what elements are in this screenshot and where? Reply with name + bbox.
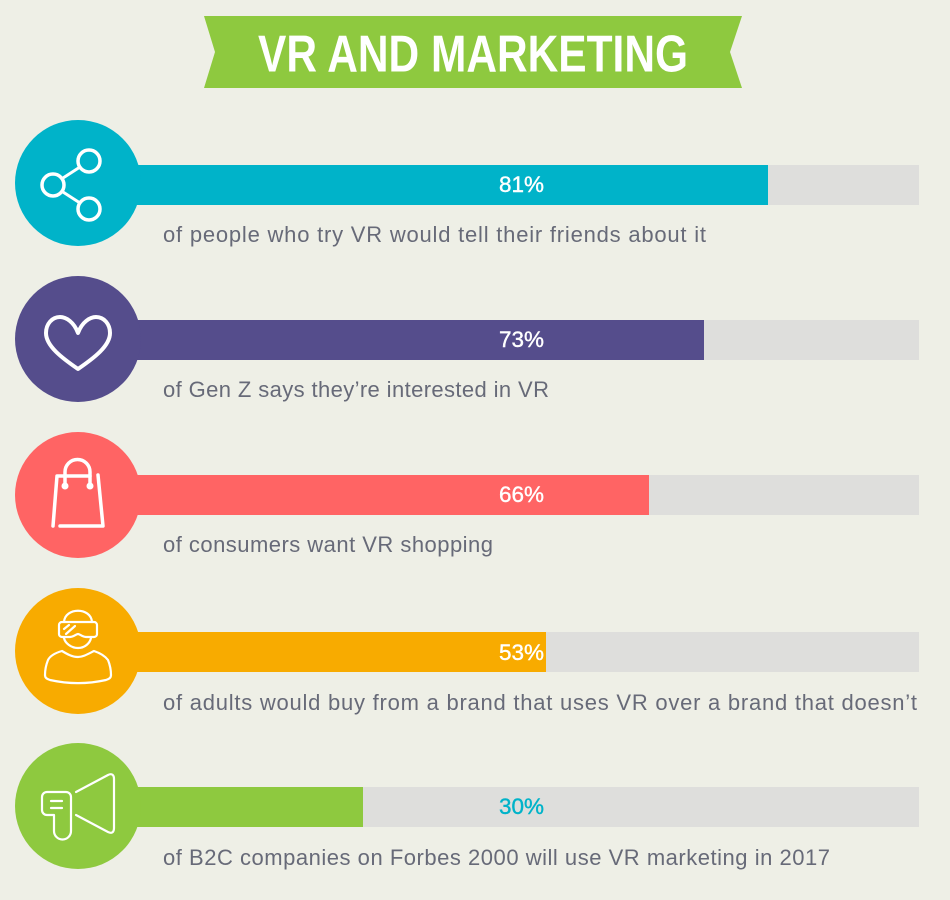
- bar: 66%: [78, 475, 649, 515]
- caption: of consumers want VR shopping: [163, 532, 493, 557]
- icon circle: share: [15, 120, 141, 246]
- panel: row 5 megaphone: [15, 743, 919, 870]
- panel: row 2 heart: [15, 276, 919, 402]
- panel: row 1 share: [15, 120, 919, 247]
- value 81%: 81%: [499, 172, 544, 197]
- icon circle: shopping bag: [15, 432, 141, 558]
- panel: row 3 shopping: [15, 432, 919, 558]
- bar: 30%: [78, 787, 363, 827]
- value 53%: 53%: [499, 640, 544, 665]
- value 66%: 66%: [499, 482, 544, 507]
- icon circle: person with VR headset: [15, 588, 141, 714]
- panel: row 4 VR headset: [15, 588, 919, 715]
- icon circle: heart: [15, 276, 141, 402]
- bar: 53%: [78, 632, 546, 672]
- title: VR AND MARKETING: [258, 26, 688, 84]
- caption: of B2C companies on Forbes 2000 will use VR marketing in 2017: [163, 845, 830, 870]
- value 30%: 30%: [499, 794, 544, 819]
- bar: 73%: [78, 320, 704, 360]
- title banner: [204, 16, 742, 88]
- icon circle: megaphone: [15, 743, 141, 869]
- value 73%: 73%: [499, 327, 544, 352]
- caption: of people who try VR would tell their friends about it: [163, 222, 706, 247]
- caption: of adults would buy from a brand that uses VR over a brand that doesn’t: [163, 690, 917, 715]
- bar: 81%: [78, 165, 768, 205]
- caption: of Gen Z says they’re interested in VR: [163, 377, 549, 402]
